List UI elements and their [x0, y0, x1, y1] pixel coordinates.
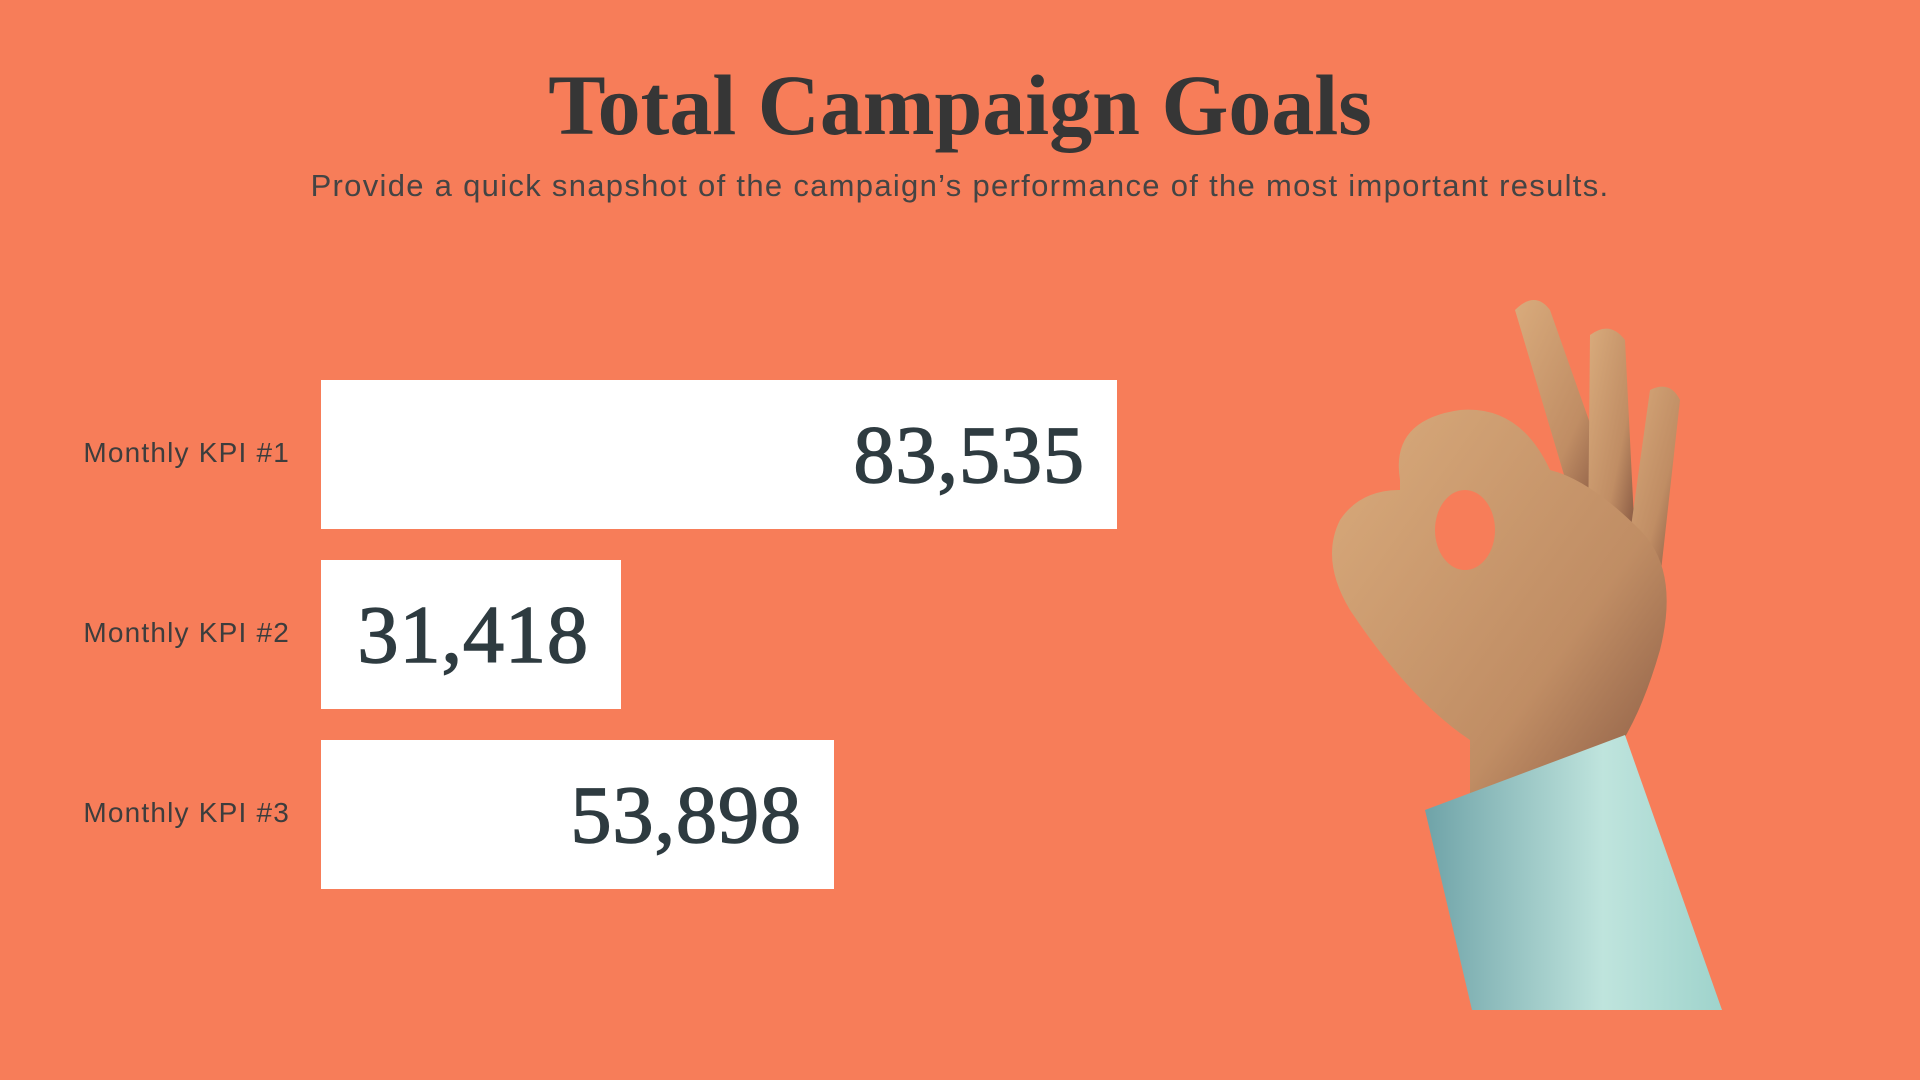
label: KPI 1: Monthly KPI #1 — [83, 437, 290, 468]
bar: KPI 1: 83,535 — [854, 409, 1085, 500]
subtitle: Provide a quick snapshot of the campaign’s performance of the most important results. — [311, 168, 1609, 203]
title: Total Campaign Goals — [548, 57, 1372, 153]
label: KPI 3: Monthly KPI #3 — [83, 797, 290, 828]
bar: KPI 2 — [321, 560, 621, 709]
bar: KPI 3: 53,898 — [570, 769, 802, 860]
bar: KPI 3 — [321, 740, 834, 889]
sleeve — [1425, 735, 1722, 1010]
icon: OK hand — [1332, 300, 1722, 1010]
bar: KPI 2: 31,418 — [358, 589, 589, 680]
label: KPI 2: Monthly KPI #2 — [83, 617, 290, 648]
bar: KPI 1 — [321, 380, 1117, 529]
